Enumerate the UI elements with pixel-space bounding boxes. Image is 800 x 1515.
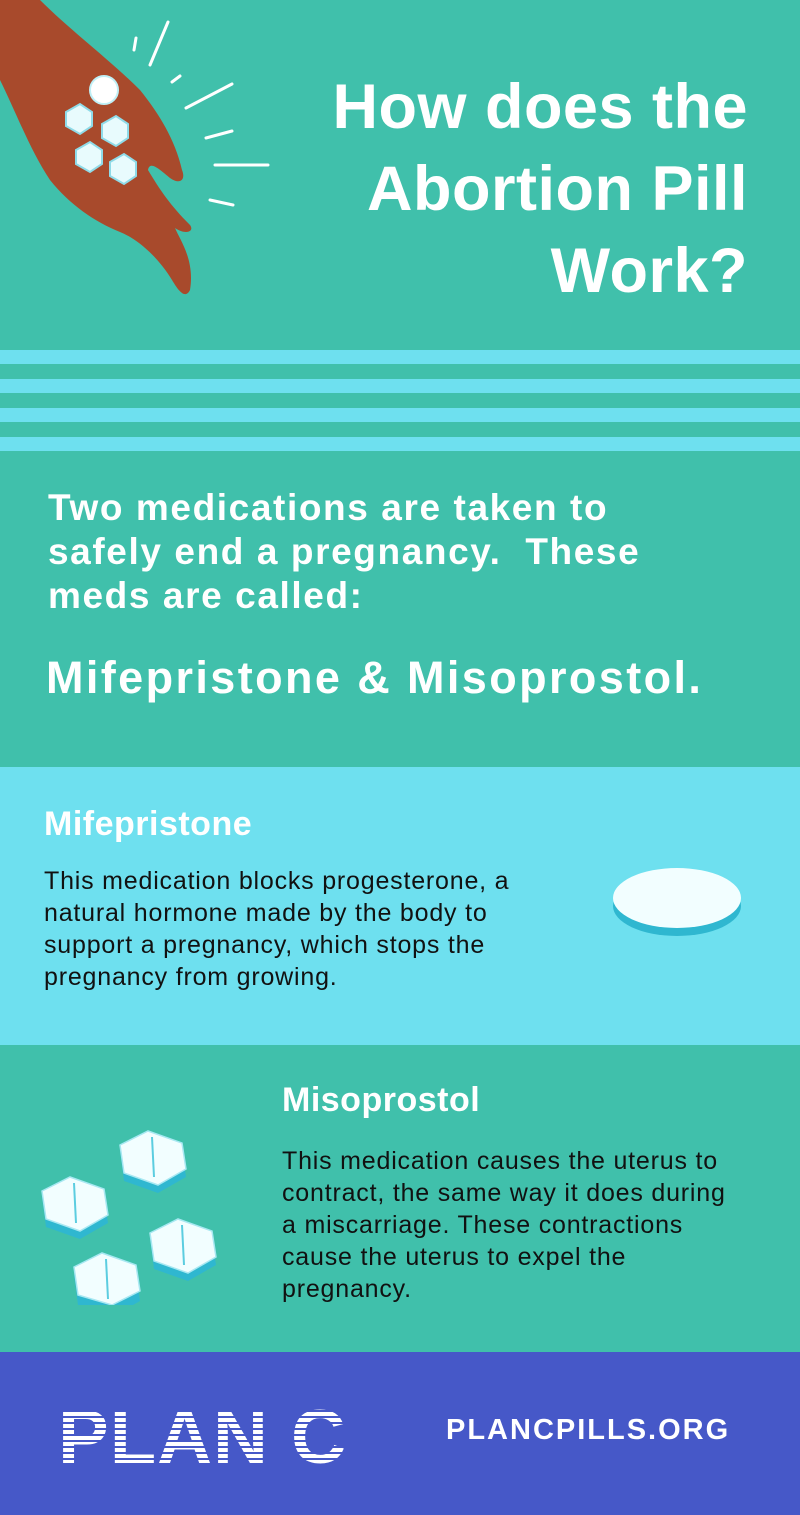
logo: PLAN C: PLAN C bbox=[58, 1395, 347, 1480]
icon: four hexagonal pills bbox=[41, 1130, 217, 1305]
icon: round pill bbox=[613, 868, 741, 936]
text: misoprostol: This medication causes the uterus to bbox=[282, 1147, 718, 1175]
intro text: safely end a pregnancy. These bbox=[48, 531, 640, 572]
text: mifepristone: This medication blocks progesterone, a bbox=[44, 867, 509, 895]
text: mifepristone: pregnancy from growing. bbox=[44, 963, 338, 991]
website: PLANCPILLS.ORG bbox=[446, 1414, 730, 1446]
intro text bbox=[48, 487, 640, 616]
title: How does the Abortion Pill Work? bbox=[332, 72, 748, 306]
text: misoprostol: cause the uterus to expel the bbox=[282, 1243, 626, 1271]
intro text: meds are called: bbox=[48, 575, 364, 616]
text: mifepristone: support a pregnancy, which stops the bbox=[44, 931, 485, 959]
heading: mifepristone: Mifepristone bbox=[44, 805, 252, 843]
panel: mifepristone bbox=[0, 767, 800, 1045]
intro text: Two medications are taken to bbox=[48, 487, 608, 528]
illustration: hand with pills bbox=[0, 0, 270, 294]
medication names: Mifepristone & Misoprostol. bbox=[46, 652, 703, 703]
text: misoprostol: contract, the same way it does during bbox=[282, 1179, 726, 1207]
footer band bbox=[0, 1352, 800, 1515]
text: misoprostol bbox=[282, 1147, 726, 1303]
text: misoprostol: pregnancy. bbox=[282, 1275, 412, 1303]
stripes band bbox=[0, 350, 800, 451]
text: mifepristone bbox=[44, 867, 509, 991]
heading: misoprostol: Misoprostol bbox=[282, 1081, 480, 1119]
text: misoprostol: a miscarriage. These contractions bbox=[282, 1211, 683, 1239]
text: mifepristone: natural hormone made by the body to bbox=[44, 899, 488, 927]
panel: misoprostol bbox=[41, 1081, 726, 1305]
